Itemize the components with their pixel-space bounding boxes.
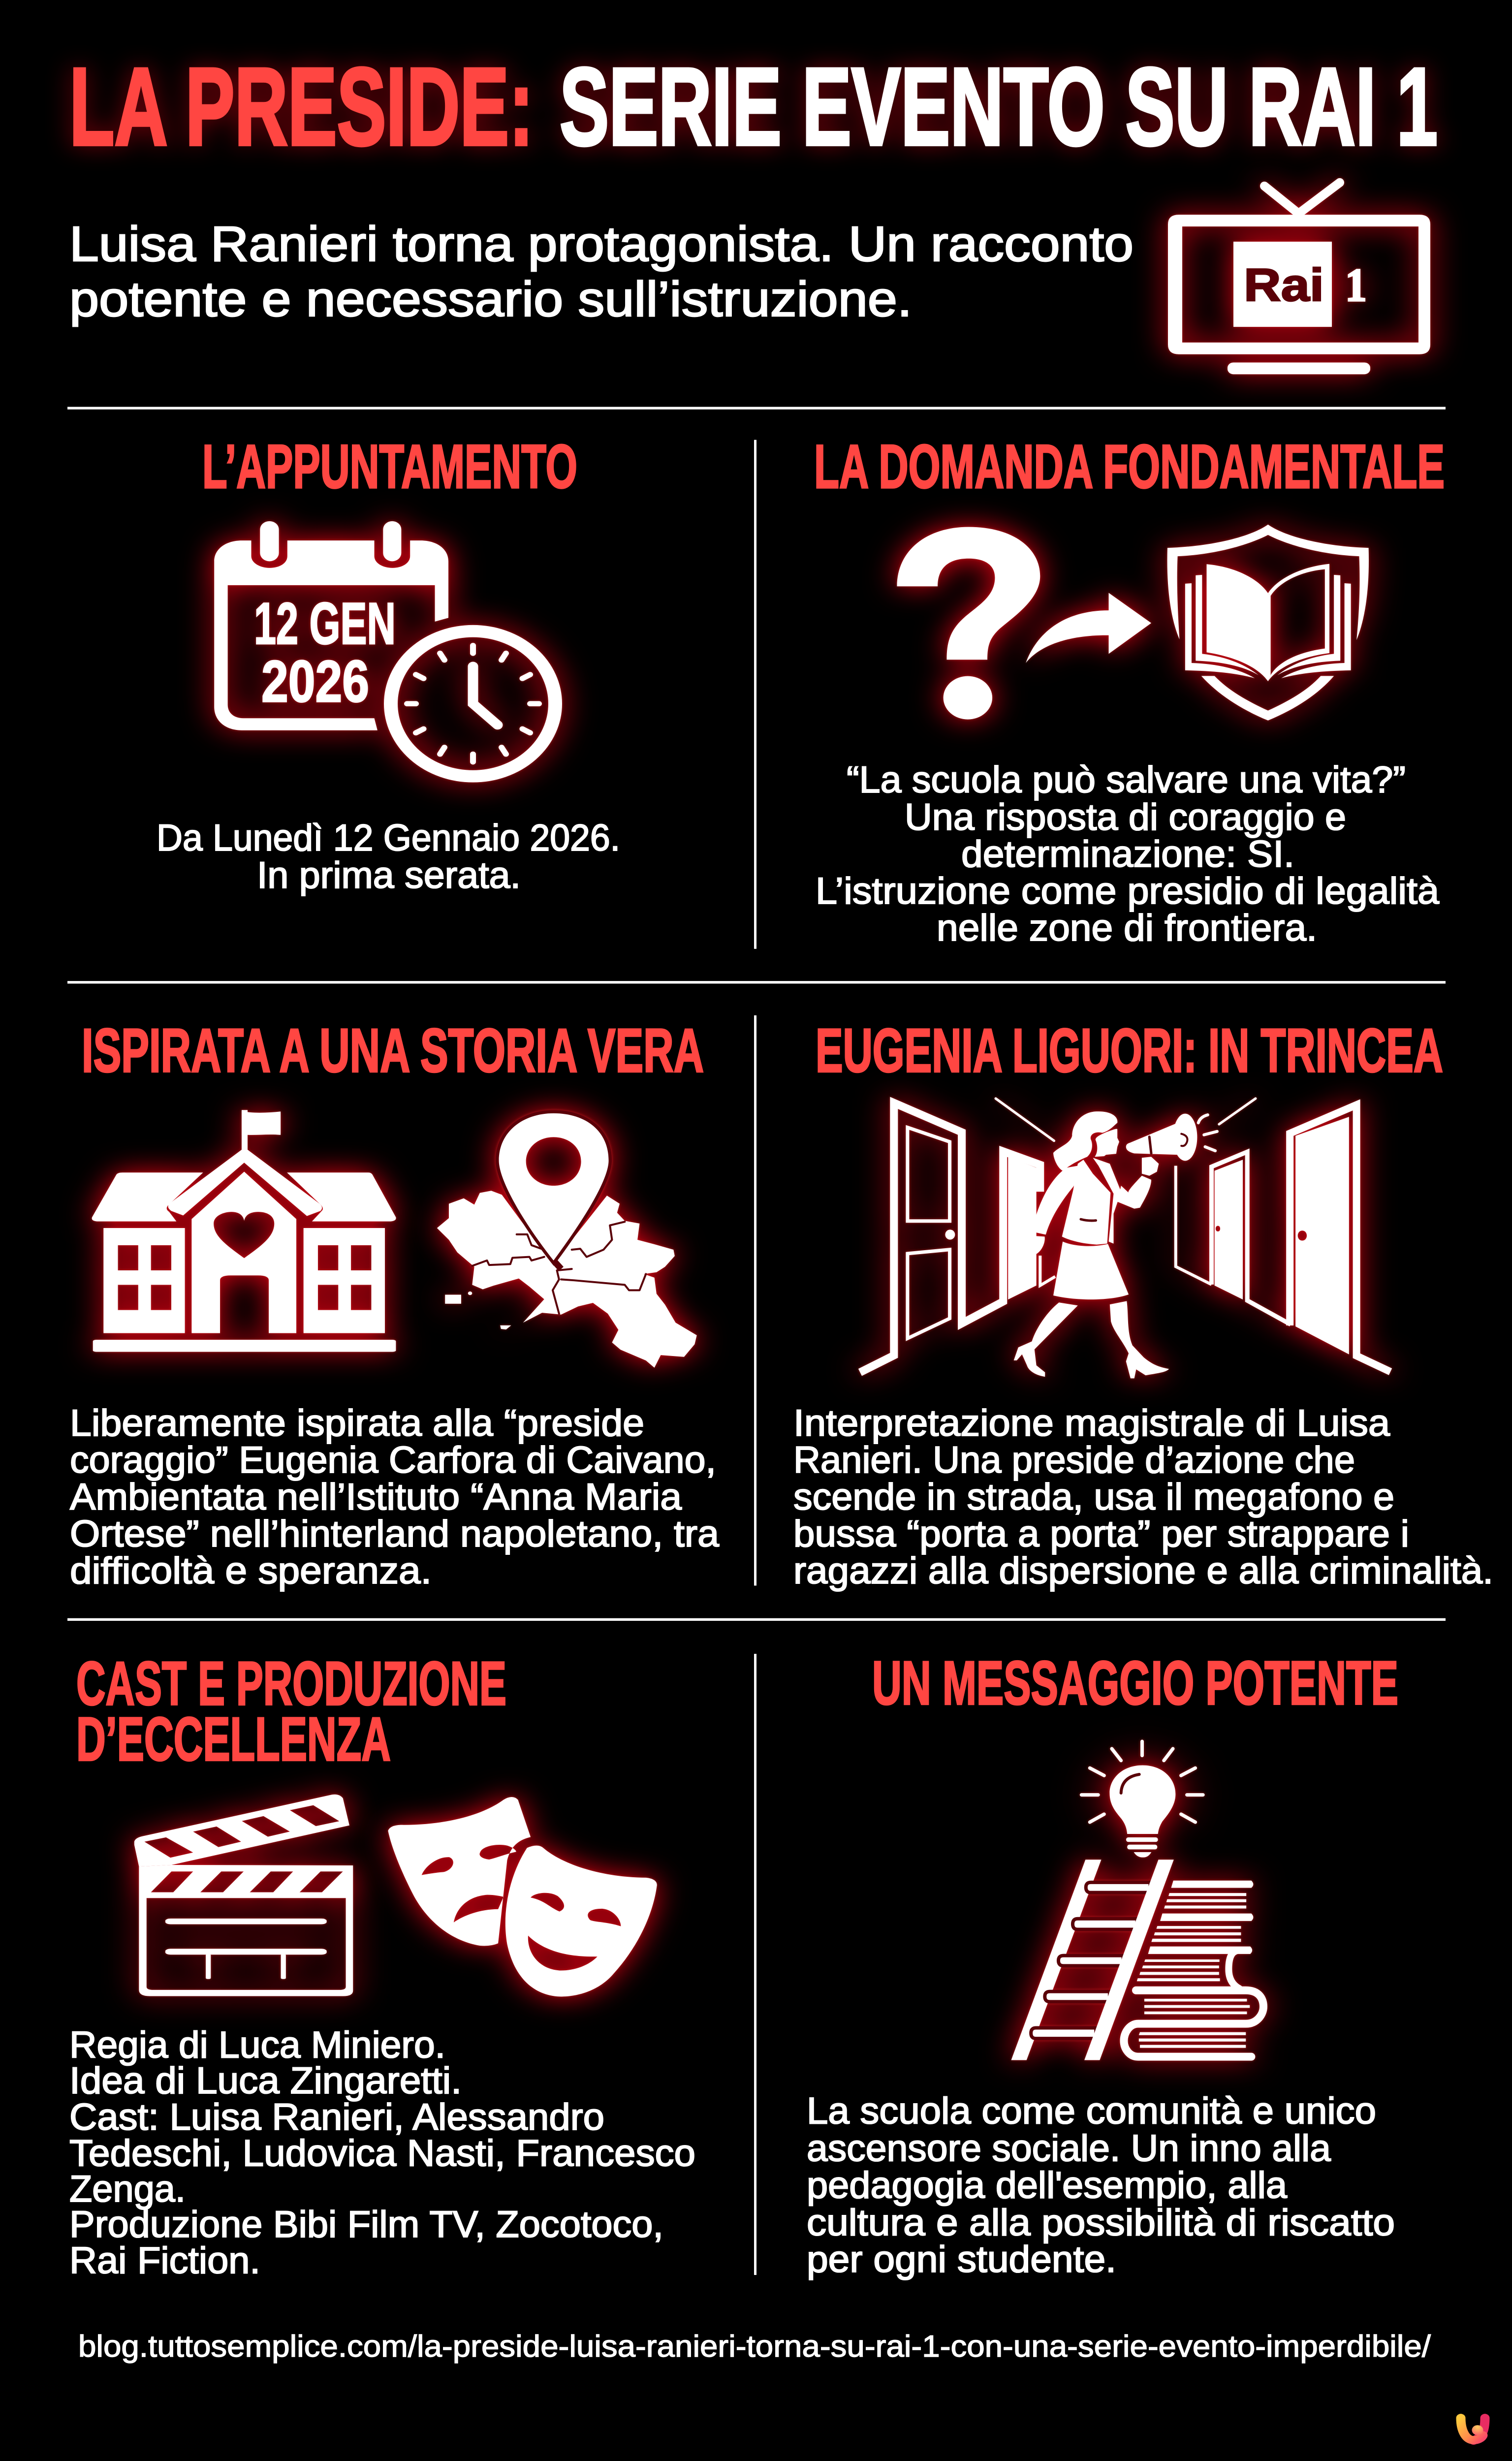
icon: calendar and clock (214, 521, 555, 776)
icon: calendar and clock: 2026 (261, 649, 369, 715)
icon: calendar and clock: 12 GEN (254, 591, 396, 657)
text: character description: scende in strada, usa il megafono e (793, 1477, 1394, 1518)
divider (754, 1015, 756, 1585)
divider (754, 440, 756, 949)
icon: film clapperboard (134, 1795, 353, 1996)
text: credits: Rai Fiction. (69, 2240, 260, 2281)
subtitle: potente e necessario sull’istruzione. (69, 271, 912, 327)
heading: ispirata a una storia vera: ISPIRATA A UNA STORIA VERA (82, 1016, 704, 1085)
text: message: cultura e alla possibilità di riscatto (807, 2202, 1395, 2244)
icon: theatre masks (388, 1797, 657, 1996)
text: date (157, 818, 620, 896)
panel: un messaggio potente (807, 1649, 1398, 2280)
text: character description: bussa “porta a porta” per strappare i (793, 1514, 1409, 1555)
text: inspiration: difficoltà e speranza. (70, 1550, 432, 1592)
text: credits: Zenga. (69, 2168, 186, 2210)
icon: woman with megaphone in school corridor (860, 1099, 1390, 1378)
text: character description (793, 1402, 1493, 1592)
heading: cast e produzione: CAST E PRODUZIONE (76, 1649, 506, 1718)
source url: blog.tuttosemplice.com/la-preside-luisa-ranieri-torna-su-rai-1-con-una-serie-evento-imperdibile/ (78, 2329, 1431, 2363)
divider (754, 1654, 756, 2275)
text: question: “La scuola può salvare una vita?” (847, 759, 1406, 801)
subtitle: Luisa Ranieri torna protagonista. Un racconto (69, 216, 1134, 271)
text: inspiration: Ortese” nell’hinterland napoletano, tra (70, 1514, 720, 1555)
text: message (807, 2090, 1395, 2280)
text: inspiration: Ambientata nell’Istituto “Anna Maria (70, 1477, 682, 1518)
text: credits: Cast: Luisa Ranieri, Alessandro (69, 2097, 604, 2138)
icon: light bulb, ladder and books (1011, 1741, 1263, 2060)
panel: cast e produzione (69, 1649, 695, 2281)
icon: television with Rai 1 logo: Rai (1244, 259, 1324, 311)
divider (67, 407, 1446, 410)
text: inspiration: coraggio” Eugenia Carfora di Caivano, (70, 1439, 716, 1481)
text: date: Da Lunedì 12 Gennaio 2026. (157, 818, 620, 859)
text: question: Una risposta di coraggio e (905, 796, 1346, 838)
panel: ispirata a una storia vera (70, 1016, 720, 1592)
text: credits: Produzione Bibi Film TV, Zocotoco, (69, 2204, 663, 2245)
title: LA PRESIDE: (69, 45, 534, 168)
text: question: L’istruzione come presidio di legalità (816, 871, 1440, 912)
icon: television with Rai 1 logo: 1 (1345, 259, 1367, 312)
text: date: In prima serata. (257, 855, 521, 896)
heading: cast e produzione: D’ECCELLENZA (76, 1705, 391, 1774)
panel: eugenia liguori (793, 1016, 1493, 1592)
text: message: La scuola come comunità e unico (807, 2090, 1376, 2132)
text: message: per ogni studente. (807, 2239, 1116, 2280)
title (69, 45, 1438, 168)
icon: location pin over map of Campania (437, 1113, 697, 1368)
icon: question mark, arrow and shield with book (897, 525, 1369, 721)
text: message: pedagogia dell'esempio, alla (807, 2165, 1288, 2207)
divider (67, 1618, 1446, 1621)
subtitle (69, 216, 1134, 327)
icon: television with Rai 1 logo (1168, 183, 1430, 374)
text: question: nelle zone di frontiera. (937, 908, 1317, 949)
text: credits: Regia di Luca Miniero. (69, 2024, 445, 2066)
text: message: ascensore sociale. Un inno alla (807, 2128, 1331, 2170)
text: question: determinazione: SI. (961, 833, 1294, 875)
icon: logo (1461, 2418, 1485, 2440)
text: question (816, 759, 1440, 949)
heading: cast e produzione (76, 1649, 506, 1774)
text: inspiration (70, 1402, 720, 1592)
divider (67, 981, 1446, 983)
text: credits (69, 2024, 695, 2281)
text: credits: Tedeschi, Ludovica Nasti, Francesco (69, 2133, 695, 2174)
heading: l'appuntamento: L’APPUNTAMENTO (202, 432, 577, 501)
panel: l'appuntamento (157, 432, 620, 896)
text: character description: Interpretazione magistrale di Luisa (793, 1402, 1390, 1444)
text: credits: Idea di Luca Zingaretti. (69, 2060, 462, 2102)
panel: la domanda fondamentale (814, 432, 1445, 949)
text: inspiration: Liberamente ispirata alla “preside (70, 1402, 644, 1444)
icon: school with heart (92, 1110, 396, 1352)
text: character description: Ranieri. Una preside d’azione che (793, 1439, 1355, 1481)
